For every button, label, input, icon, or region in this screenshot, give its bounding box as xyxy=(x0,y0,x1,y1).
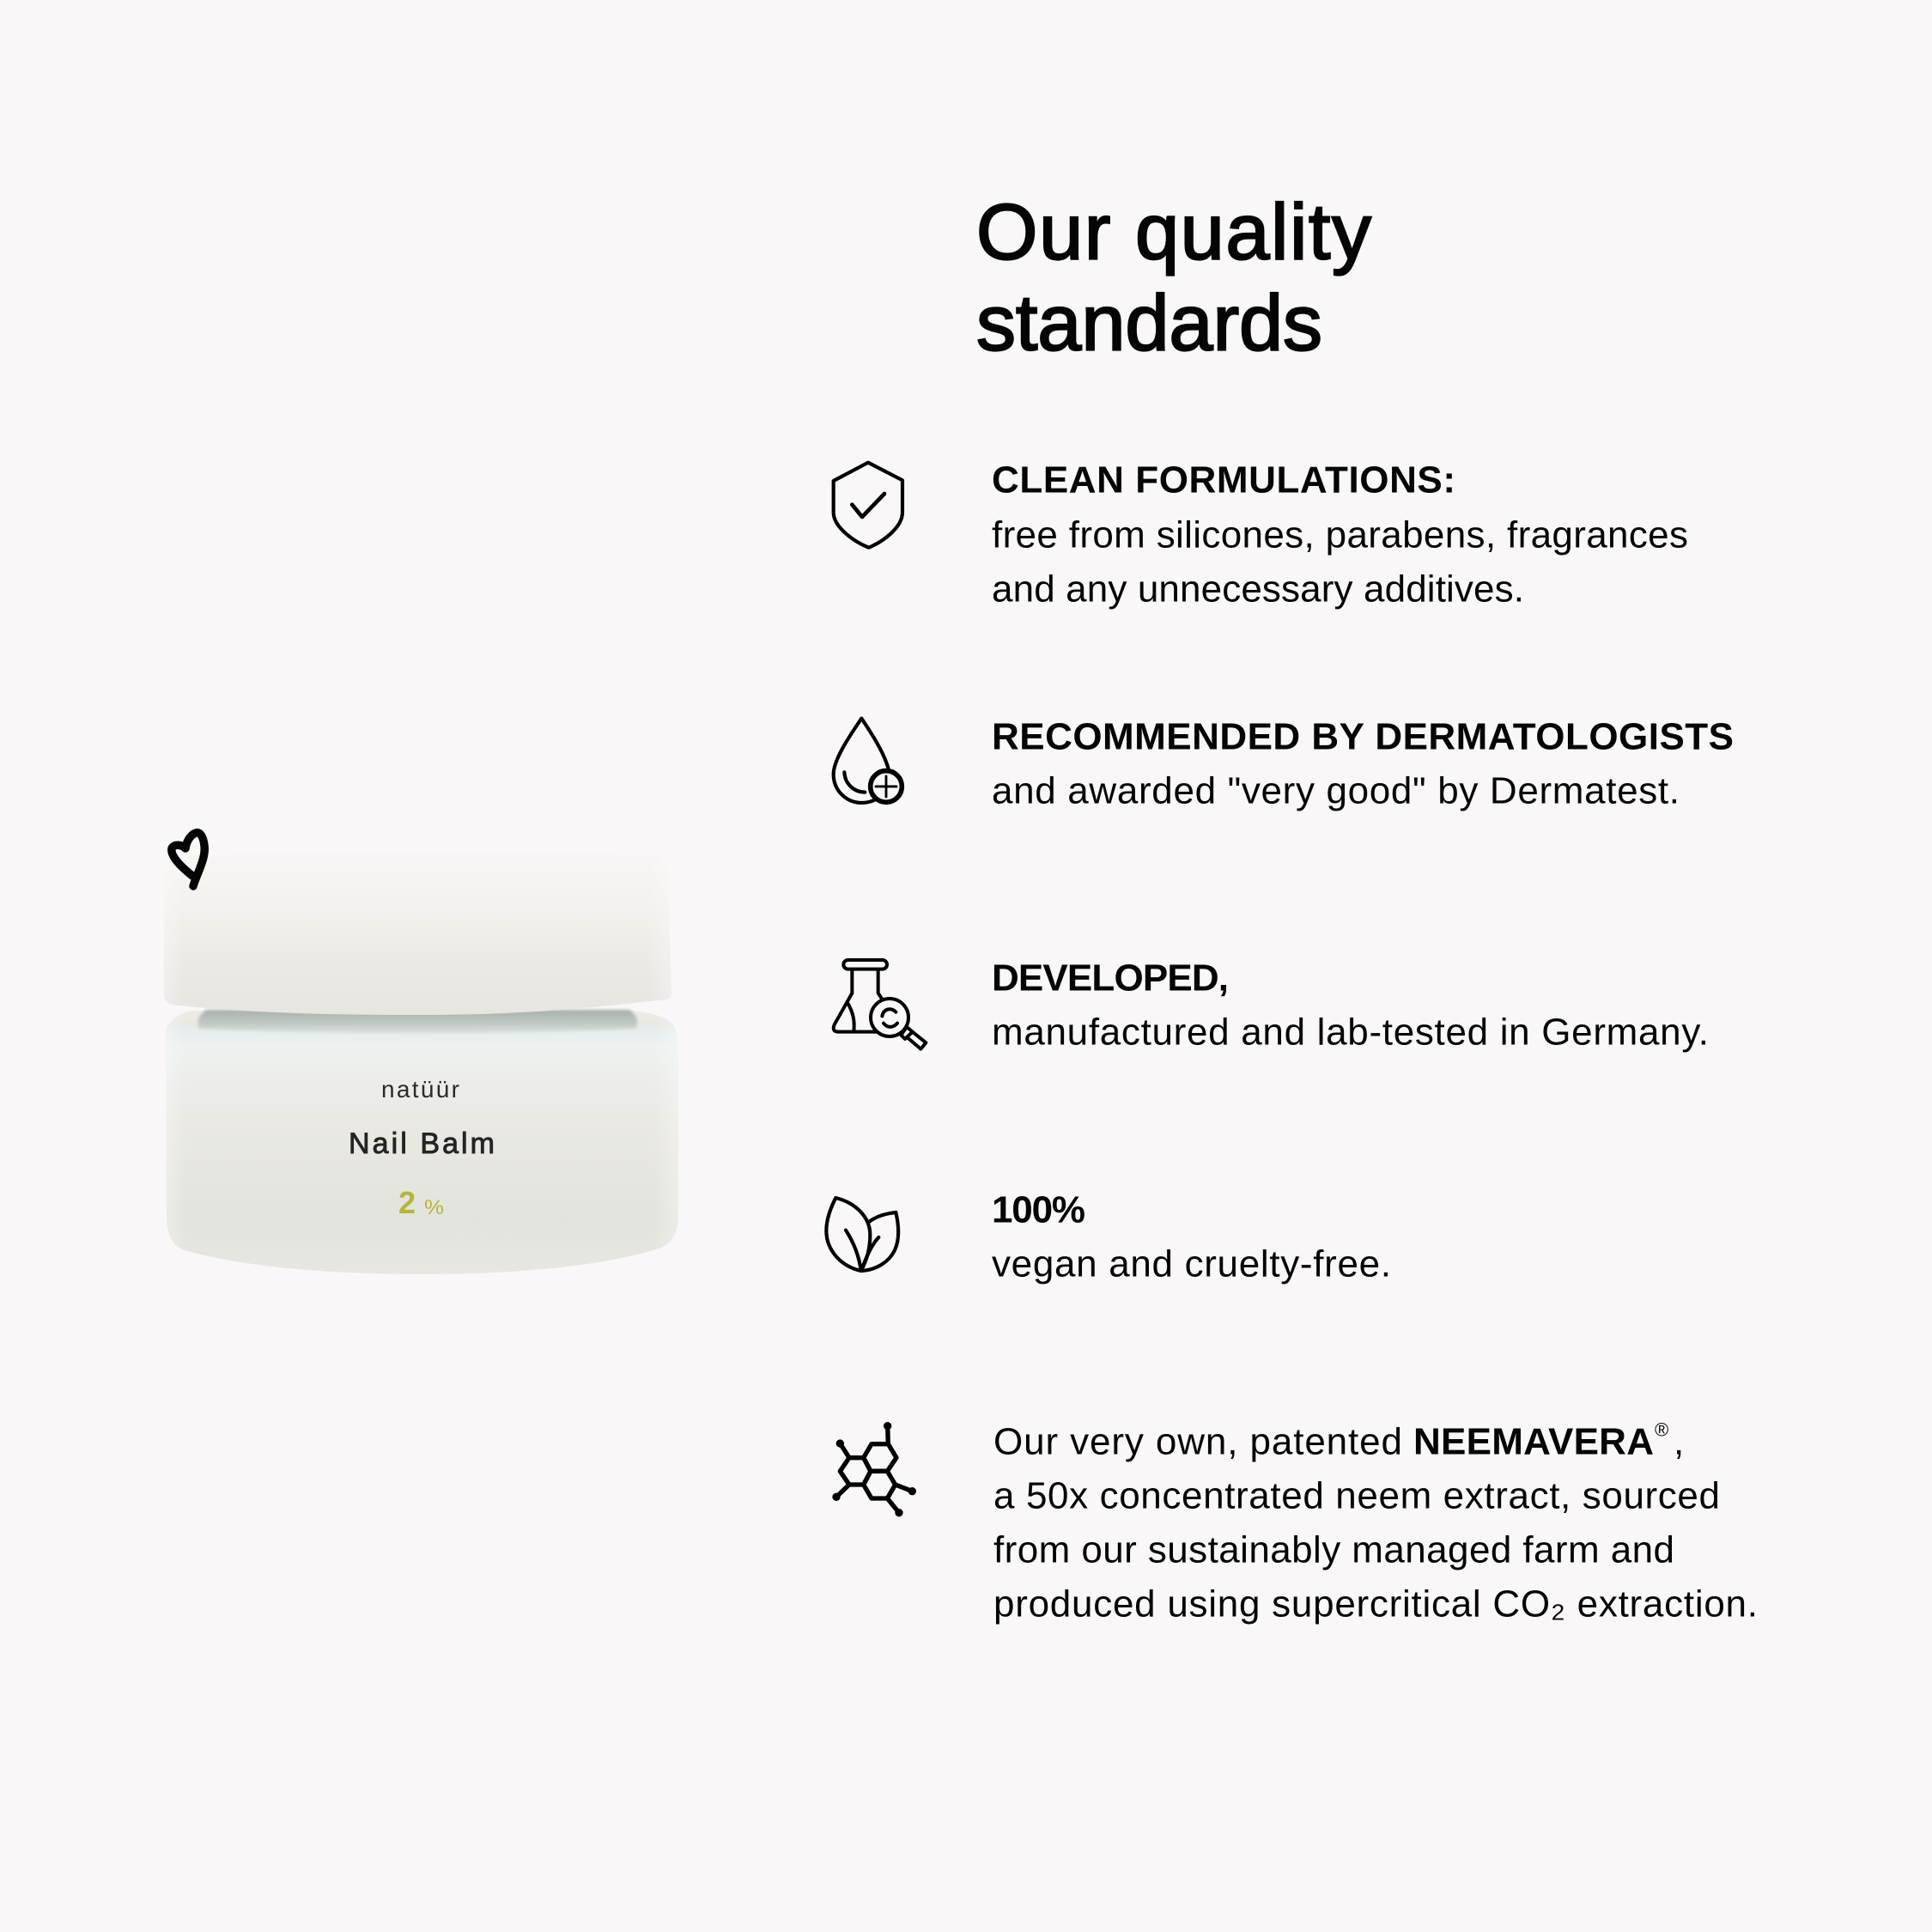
text block: clean formulations: and any unnecessary additives. xyxy=(992,568,1524,610)
text block: vegan: vegan and cruelty-free. xyxy=(992,1243,1391,1285)
icon: drop with plus xyxy=(834,719,902,803)
concentration xyxy=(398,1185,444,1220)
text block: recommended by dermatologists: and awarded "very good" by Dermatest. xyxy=(992,769,1680,812)
text block: vegan xyxy=(992,1188,1391,1285)
text block: neemavera: ® xyxy=(1655,1419,1668,1441)
text block: neemavera: a 50x concentrated neem extract, sourced xyxy=(993,1475,1720,1516)
text block: neemavera: Our very own, patented xyxy=(993,1420,1402,1463)
concentration: % xyxy=(424,1196,444,1219)
text block: vegan: 100% xyxy=(992,1188,1085,1231)
title: Our quality xyxy=(976,189,1371,276)
text block: recommended by dermatologists: RECOMMENDED BY DERMATOLOGISTS xyxy=(992,716,1734,757)
brand label: natüür xyxy=(381,1076,459,1103)
product name: Nail Balm xyxy=(349,1127,495,1160)
jar neck shadow xyxy=(197,1010,637,1033)
text block: clean formulations xyxy=(992,459,1688,610)
text block: neemavera xyxy=(993,1419,1758,1625)
icon: hand-drawn heart xyxy=(172,833,204,886)
text block: neemavera: NEEMAVERA xyxy=(1413,1420,1654,1463)
text block: developed: manufactured and lab-tested in Germany. xyxy=(992,1012,1709,1053)
concentration: 2 xyxy=(398,1185,416,1220)
text block: clean formulations: free from silicones, parabens, fragrances xyxy=(992,513,1688,556)
text block: developed: DEVELOPED, xyxy=(992,957,1229,999)
title: standards xyxy=(976,280,1322,368)
icon: molecule xyxy=(832,1422,916,1516)
title xyxy=(976,189,1371,368)
text block: neemavera: , xyxy=(1674,1420,1684,1463)
icon: two leaves xyxy=(826,1198,898,1271)
product image: nail balm jar xyxy=(164,833,678,1274)
text block: neemavera: from our sustainably managed farm and xyxy=(993,1528,1674,1571)
text block: clean formulations: CLEAN FORMULATIONS: xyxy=(992,459,1455,501)
text block: recommended by dermatologists xyxy=(992,716,1734,812)
lid xyxy=(164,854,671,1015)
text block: developed xyxy=(992,957,1709,1053)
text block: neemavera: produced using supercritical CO₂ extraction. xyxy=(993,1583,1758,1625)
icon: shield with check xyxy=(834,463,902,548)
jar body xyxy=(166,1011,678,1274)
icon: flask with magnifier xyxy=(834,960,926,1049)
